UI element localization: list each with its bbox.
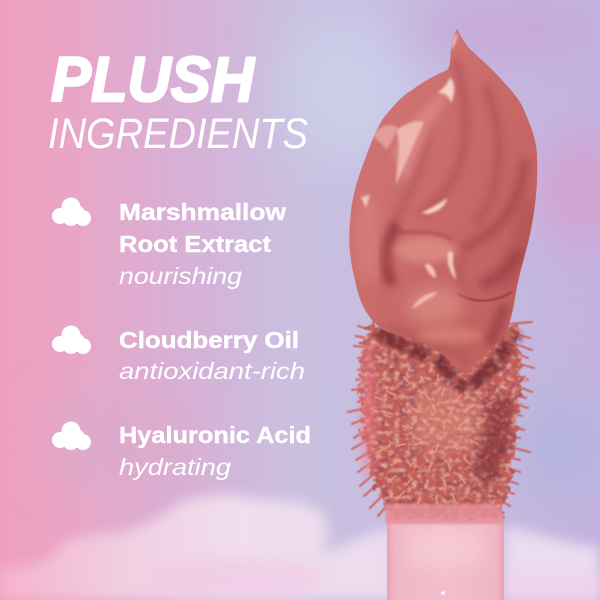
applicator tube xyxy=(387,516,504,600)
ingredient name: Cloudberry Oil xyxy=(119,327,299,353)
cream light areas xyxy=(395,237,455,263)
bottom clouds xyxy=(0,495,600,600)
ingredient benefit: nourishing xyxy=(119,263,242,289)
sponge lit centre xyxy=(409,386,481,454)
ingredient name: Marshmallow xyxy=(119,199,286,225)
sponge bristles xyxy=(375,374,496,503)
ingredient: Cloudberry Oil xyxy=(52,326,305,384)
cream folds xyxy=(462,160,525,248)
lip cream swirl xyxy=(349,29,537,373)
sponge dark shadows xyxy=(378,330,518,388)
sponge bristle spikes xyxy=(348,322,534,518)
ingredient benefit: hydrating xyxy=(119,454,231,480)
ingredient name: Hyaluronic Acid xyxy=(119,422,311,448)
sponge applicator tip xyxy=(348,322,534,524)
cream gloss highlights xyxy=(437,77,454,103)
sponge pink left edge xyxy=(360,340,376,480)
icon: cloud xyxy=(52,422,91,450)
ingredient: Marshmallow Root Extract xyxy=(52,198,286,289)
ingredient name: Root Extract xyxy=(119,231,271,257)
title line: INGREDIENTS: INGREDIENTS xyxy=(48,110,308,158)
ingredient benefit: antioxidant-rich xyxy=(119,358,305,384)
icon: cloud xyxy=(52,198,91,226)
title line: PLUSH: PLUSH xyxy=(51,45,255,115)
title xyxy=(48,45,308,158)
ingredient: Hyaluronic Acid xyxy=(52,422,311,480)
icon: cloud xyxy=(52,326,91,354)
